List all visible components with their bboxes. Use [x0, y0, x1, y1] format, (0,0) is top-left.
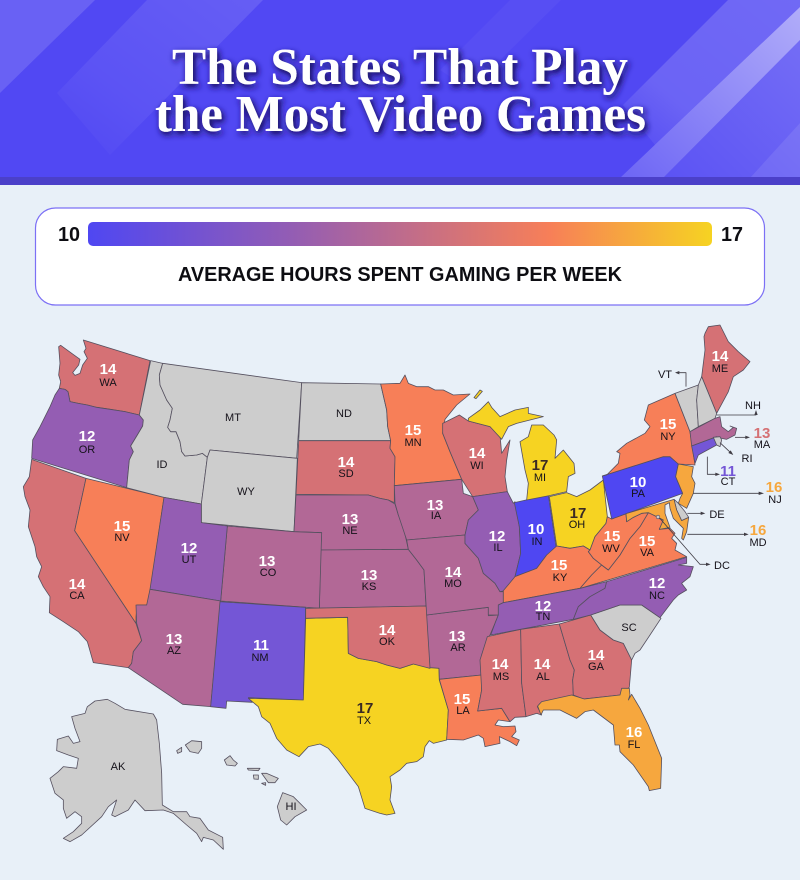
callout: DE — [687, 509, 725, 521]
callout: DE: DE — [709, 509, 725, 521]
state: AR: 13 — [449, 628, 465, 645]
legend panel — [34, 207, 766, 306]
state: TX: 17 — [357, 700, 373, 717]
state: NC — [573, 557, 693, 619]
state: OK — [306, 606, 430, 668]
callout: MD: 16 — [750, 522, 766, 539]
state: KY: KY — [553, 572, 568, 584]
state: FL: FL — [628, 739, 640, 751]
state: VA — [580, 513, 687, 588]
state: WV — [588, 513, 648, 570]
state: AK — [50, 699, 223, 849]
state: OK: OK — [379, 636, 396, 648]
state: AZ: AZ — [167, 645, 181, 657]
state: FL: 16 — [626, 724, 642, 741]
state: MS: MS — [493, 671, 509, 683]
state: NY: NY — [660, 431, 676, 443]
state: LA: LA — [456, 705, 470, 717]
state: LA: 15 — [454, 691, 470, 708]
legend max label: 17 — [721, 224, 743, 246]
state: ID: ID — [156, 459, 168, 471]
state: OR — [32, 388, 143, 488]
callout: VT — [658, 369, 686, 387]
callout: NH — [717, 400, 761, 415]
state: NV: 15 — [114, 518, 130, 535]
state: NH — [697, 377, 717, 427]
state: AZ — [128, 589, 221, 707]
state: MN: 15 — [405, 422, 421, 439]
state: WA: WA — [99, 377, 117, 389]
state: AZ: 13 — [166, 631, 182, 648]
state: OR: 12 — [79, 428, 95, 445]
callout: NJ: 16 — [766, 479, 782, 496]
state: NE: 13 — [342, 511, 358, 528]
state: HI: HI — [286, 801, 296, 813]
state: CO — [221, 526, 322, 608]
state: KY — [503, 546, 602, 603]
state: OH: OH — [569, 519, 585, 531]
state: MI: MI — [534, 472, 546, 484]
state: AL: AL — [536, 671, 550, 683]
state: VA: 15 — [639, 533, 655, 550]
state: AR — [427, 607, 498, 679]
state: UT: 12 — [181, 540, 197, 557]
callout: VT: VT — [658, 369, 672, 381]
state: MO: MO — [444, 578, 462, 590]
callout: CT: CT — [721, 476, 736, 488]
state: NM: NM — [251, 652, 269, 664]
state: MT — [159, 363, 302, 458]
state: MI: 17 — [532, 457, 548, 474]
state: AL — [521, 624, 574, 717]
callout: MA: MA — [754, 439, 771, 451]
state: SD: SD — [338, 468, 354, 480]
title — [155, 39, 646, 143]
state: UT — [150, 497, 227, 601]
state: OH — [549, 480, 607, 550]
state: NC: NC — [649, 590, 665, 602]
callout: DC — [656, 515, 730, 572]
state: MD — [626, 499, 689, 540]
state: WA — [59, 340, 150, 415]
state: WI — [443, 415, 510, 497]
state: HI — [224, 756, 307, 825]
state: OK: 14 — [379, 622, 396, 639]
state: GA: 14 — [588, 647, 605, 664]
state: WV: WV — [602, 543, 621, 555]
callout: NJ — [693, 479, 782, 506]
state: MA — [690, 417, 737, 446]
state: ME: ME — [712, 363, 728, 375]
state: TN — [491, 582, 607, 635]
state: IA: IA — [431, 510, 442, 522]
state: WY: WY — [237, 486, 256, 498]
state: IN: IN — [532, 536, 543, 548]
header banner — [0, 0, 800, 185]
state: ME — [702, 325, 750, 413]
state: VA: VA — [640, 547, 655, 559]
state: TX — [248, 617, 448, 815]
title: the Most Video Games — [155, 86, 646, 143]
state: RI — [713, 437, 722, 447]
state: MO — [407, 535, 503, 615]
state: UT: UT — [182, 554, 197, 566]
state: IN — [514, 495, 557, 577]
state: NY: 15 — [660, 416, 676, 433]
state: IL: IL — [493, 542, 503, 554]
state: NJ — [676, 464, 695, 508]
callout: MD — [687, 522, 767, 549]
state: CA — [23, 459, 142, 668]
callout: NH: NH — [745, 400, 761, 412]
state: NM — [211, 602, 306, 708]
state: GA: GA — [588, 661, 605, 673]
state: IA: 13 — [427, 497, 443, 514]
state: SD: 14 — [338, 454, 355, 471]
state: MO: 14 — [445, 564, 462, 581]
state: WI: 14 — [469, 445, 486, 462]
legend gradient bar — [88, 222, 712, 246]
state: MI — [468, 390, 575, 500]
callout: MD: MD — [749, 537, 767, 549]
state: PA: PA — [631, 488, 646, 500]
state: MS — [478, 629, 526, 722]
state: WV: 15 — [604, 528, 620, 545]
state: KS: KS — [362, 581, 376, 593]
state: KS — [319, 549, 426, 608]
state: AK: AK — [111, 761, 126, 773]
state: DE — [674, 499, 689, 521]
state: TX: TX — [357, 715, 372, 727]
state: TN: TN — [536, 611, 550, 623]
state: FL — [538, 688, 662, 791]
state: LA — [439, 675, 519, 747]
state: ND: ND — [336, 408, 352, 420]
state: SC: SC — [621, 622, 637, 634]
state: MN: MN — [404, 437, 422, 449]
state: PA — [602, 457, 683, 519]
state: KS: 13 — [361, 567, 377, 584]
state: NY — [602, 393, 695, 476]
callout: CT — [707, 457, 736, 488]
state: NE — [294, 495, 408, 550]
state: IL: 12 — [489, 528, 505, 545]
state: NV: NV — [114, 532, 130, 544]
state: ID — [127, 361, 207, 504]
state: IL — [465, 492, 521, 592]
state: CA: 14 — [69, 576, 86, 593]
state: ND — [299, 383, 391, 441]
state: NM: 11 — [253, 637, 269, 654]
callout: DC: DC — [714, 560, 730, 572]
state: VT — [675, 385, 698, 432]
title: The States That Play — [172, 39, 628, 96]
state: WY — [201, 450, 297, 532]
state: WA: 14 — [100, 361, 117, 378]
state: CO: CO — [260, 567, 277, 579]
callout: NJ: NJ — [768, 494, 782, 506]
state: MN — [381, 375, 470, 486]
callout: CT: 11 — [720, 463, 736, 480]
state: TN: 12 — [535, 598, 551, 615]
state: PA: 10 — [630, 474, 646, 491]
legend caption: AVERAGE HOURS SPENT GAMING PER WEEK — [178, 264, 623, 286]
state: NE: NE — [342, 525, 358, 537]
state: CA: CA — [69, 590, 85, 602]
state: CT — [692, 437, 717, 463]
legend min label: 10 — [58, 224, 80, 246]
state: KY: 15 — [551, 557, 567, 574]
state: MS: 14 — [492, 656, 509, 673]
state: CO: 13 — [259, 553, 275, 570]
state: NC: 12 — [649, 575, 665, 592]
state: IA — [394, 479, 478, 540]
callout: MA: 13 — [754, 425, 770, 442]
state: SC — [591, 605, 661, 660]
state: IN: 10 — [528, 521, 544, 538]
state: OH: 17 — [570, 505, 586, 522]
callout: RI: RI — [742, 453, 752, 465]
state: MT: MT — [225, 412, 241, 424]
state: OR: OR — [79, 444, 95, 456]
callout: MA — [735, 425, 771, 451]
state: ME: 14 — [712, 348, 729, 365]
state: NV — [75, 478, 164, 623]
state: SD — [296, 441, 395, 503]
state: GA — [559, 615, 632, 699]
state: AR: AR — [450, 642, 466, 654]
state: AL: 14 — [534, 656, 551, 673]
callout: RI — [720, 443, 752, 465]
state: WI: WI — [470, 460, 484, 472]
